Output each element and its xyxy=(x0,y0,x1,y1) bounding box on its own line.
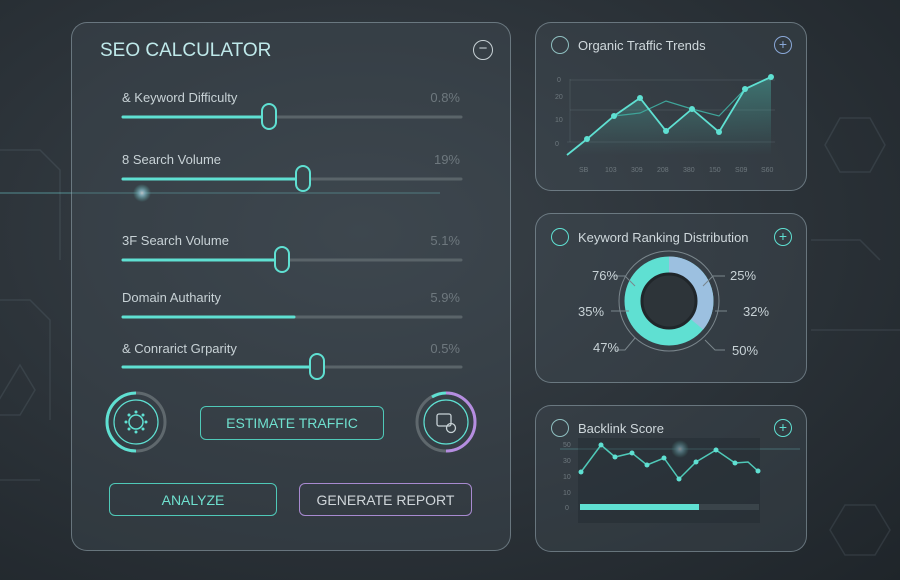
line chart: organic traffic: 103 xyxy=(605,167,617,174)
button: estimate traffic xyxy=(200,406,384,440)
line chart: organic traffic: 0 xyxy=(555,141,559,148)
sliders xyxy=(122,90,462,380)
icon: plus: + xyxy=(779,228,787,244)
icon: gear dial xyxy=(106,392,166,452)
heading: Backlink Score xyxy=(578,421,664,436)
icon: plus xyxy=(774,228,792,246)
progress bar xyxy=(580,504,759,510)
heading: Keyword Ranking Distribution xyxy=(578,230,749,245)
icon: user xyxy=(551,36,569,54)
title: SEO CALCULATOR xyxy=(100,40,271,61)
line chart: organic traffic: 380 xyxy=(683,167,695,174)
icon: minus circle xyxy=(473,40,493,60)
line chart: organic traffic: 20 xyxy=(555,94,563,101)
line chart: organic traffic: 150 xyxy=(709,167,721,174)
icon: plus xyxy=(774,419,792,437)
line chart: organic traffic: SB xyxy=(579,167,589,174)
panel: backlink score xyxy=(535,405,807,552)
slider: domain authority xyxy=(122,290,461,317)
button: estimate traffic: ESTIMATE TRAFFIC xyxy=(226,415,358,431)
line chart: organic traffic: 0 xyxy=(557,77,561,84)
slider: content: 0.5% xyxy=(430,341,460,356)
line chart: organic traffic: S60 xyxy=(761,167,774,174)
line chart: organic traffic: 208 xyxy=(657,167,669,174)
panel: keyword ranking distribution xyxy=(535,213,807,383)
icon: plus: + xyxy=(779,419,787,435)
donut chart: 25% xyxy=(730,268,756,283)
panel: organic traffic trends xyxy=(535,22,807,191)
panel: SEO calculator xyxy=(71,22,511,551)
slider: search volume: 8 Search Volume xyxy=(122,152,221,167)
line chart: organic traffic xyxy=(555,74,775,174)
button: analyze xyxy=(109,483,277,516)
donut chart: 50% xyxy=(732,343,758,358)
icon: user xyxy=(551,228,569,246)
donut chart: 35% xyxy=(578,304,604,319)
slider: domain authority: 5.9% xyxy=(430,290,460,305)
donut chart: 47% xyxy=(593,340,619,355)
button: analyze: ANALYZE xyxy=(162,492,224,508)
line chart: organic traffic: 10 xyxy=(555,117,563,124)
line chart: backlinks: 50 xyxy=(563,442,571,449)
slider: keyword difficulty: & Keyword Difficulty xyxy=(122,90,238,105)
button: generate report: GENERATE REPORT xyxy=(317,492,454,508)
slider: keyword difficulty: 0.8% xyxy=(430,90,460,105)
slider: search volume: 19% xyxy=(434,152,460,167)
icon: plus: + xyxy=(779,36,787,52)
slider: content xyxy=(122,341,461,379)
donut chart: 76% xyxy=(592,268,618,283)
donut chart: 32% xyxy=(743,304,769,319)
line chart: organic traffic: S09 xyxy=(735,167,748,174)
line chart: organic traffic: 309 xyxy=(631,167,643,174)
heading: Organic Traffic Trends xyxy=(578,38,706,53)
donut chart xyxy=(578,250,769,358)
line chart: backlinks: 10 xyxy=(563,490,571,497)
line chart: backlinks: 10 xyxy=(563,474,571,481)
icon: report dial xyxy=(416,392,476,452)
slider: domain authority: Domain Autharity xyxy=(122,290,221,305)
line chart: backlinks xyxy=(563,438,760,512)
line chart: backlinks: 30 xyxy=(563,458,571,465)
slider: content: & Conrarict Grparity xyxy=(122,341,237,356)
slider: search volume 2 xyxy=(122,233,461,272)
button: generate report xyxy=(299,483,472,516)
slider: search volume 2: 5.1% xyxy=(430,233,460,248)
slider: search volume xyxy=(122,152,461,191)
icon: plus xyxy=(774,36,792,54)
slider: keyword difficulty xyxy=(122,90,461,129)
slider: search volume 2: 3F Search Volume xyxy=(122,233,229,248)
icon: minus circle: − xyxy=(479,40,487,57)
icon: user xyxy=(551,419,569,437)
line chart: backlinks: 0 xyxy=(565,505,569,512)
